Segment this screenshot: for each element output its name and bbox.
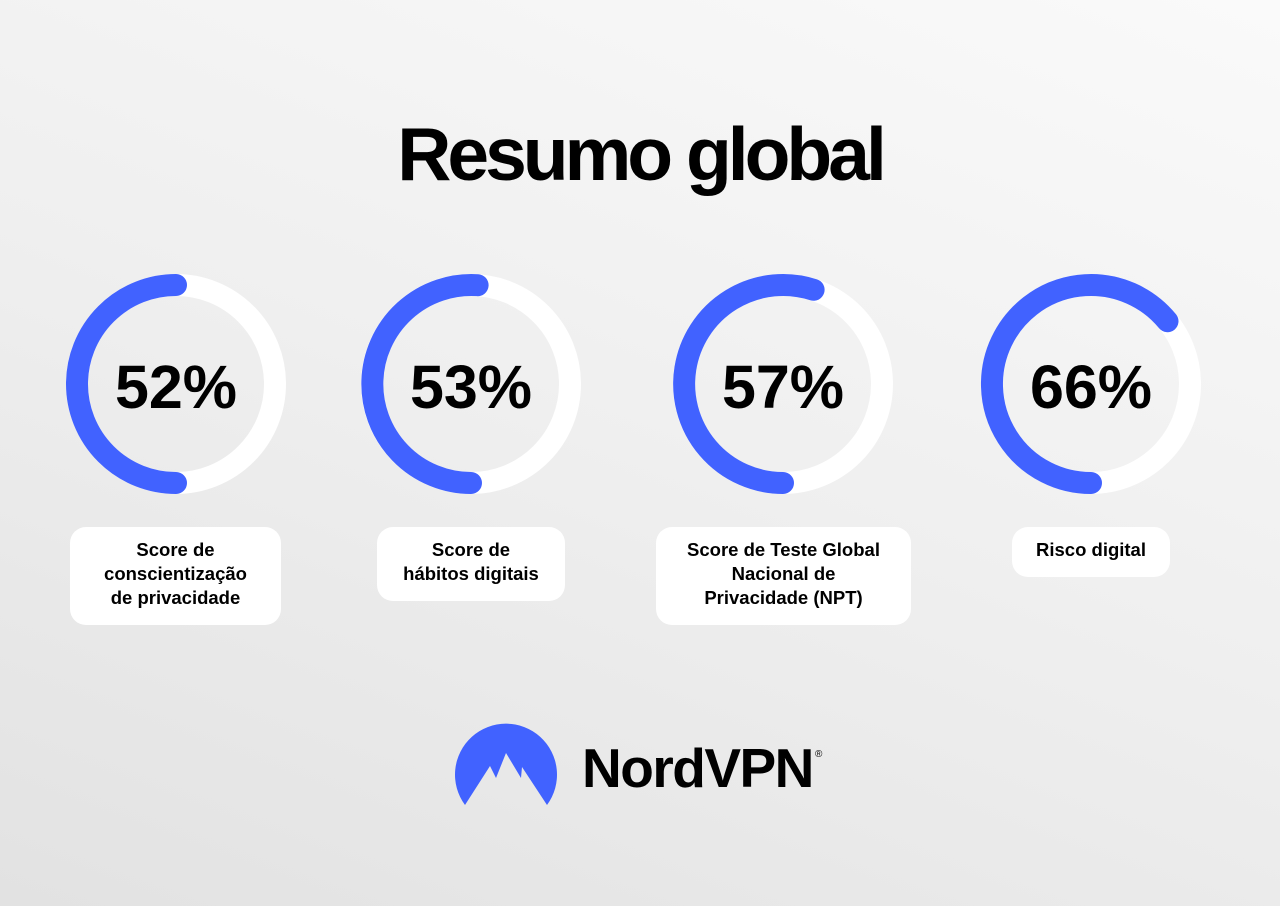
ring: 52% (77, 285, 275, 483)
ring: 57%: 57% (722, 353, 844, 421)
label: privacy awareness: conscientização (104, 563, 247, 584)
label: digital habits: hábitos digitais (403, 563, 539, 584)
ring: 57% (684, 285, 882, 483)
ring: 66%: 66% (1030, 353, 1152, 421)
ring charts: ® (815, 749, 823, 760)
label: digital habits (377, 527, 565, 601)
label: digital risk (1012, 527, 1170, 577)
label: NPT: Nacional de (732, 563, 835, 584)
label: privacy awareness (70, 527, 281, 625)
label: privacy awareness: Score de (136, 539, 215, 560)
ring: 53% (372, 285, 570, 483)
logo wordmark: NordVPN (582, 737, 813, 799)
label: privacy awareness: de privacidade (111, 587, 240, 608)
ring: 66% (992, 285, 1190, 483)
logo icon (455, 724, 557, 805)
label: NPT (656, 527, 911, 625)
label: digital habits: Score de (432, 539, 510, 560)
ring: 53%: 53% (410, 353, 532, 421)
ring: 52%: 52% (115, 353, 237, 421)
label: NPT: Privacidade (NPT) (704, 587, 863, 608)
label: digital risk: Risco digital (1036, 539, 1146, 560)
title: Resumo global (397, 112, 883, 196)
label: NPT: Score de Teste Global (687, 539, 880, 560)
